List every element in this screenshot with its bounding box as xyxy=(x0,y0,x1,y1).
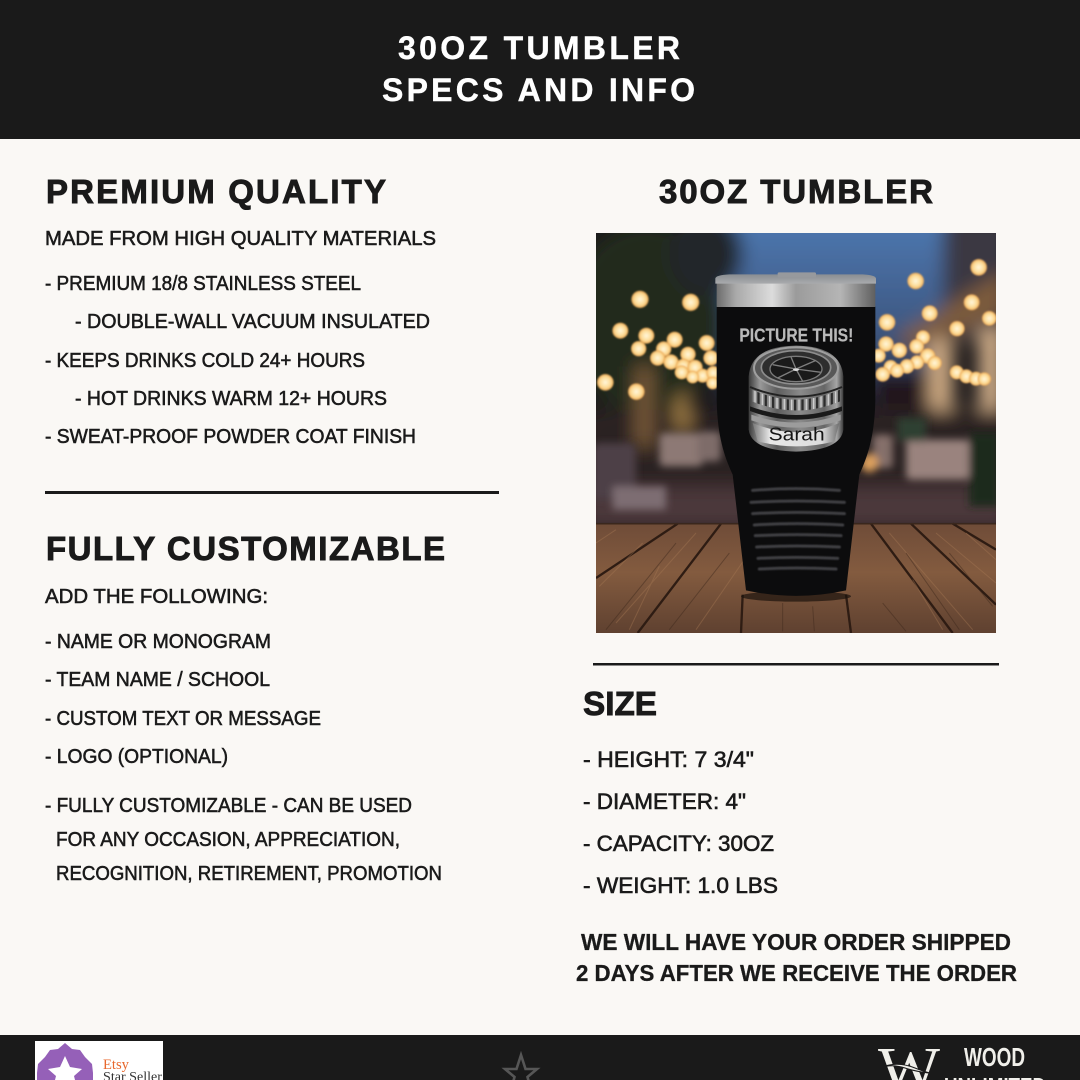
engraved slogan: PICTURE THIS! xyxy=(739,324,853,345)
heading: premium quality: PREMIUM QUALITY xyxy=(46,173,386,210)
icon: outlined star xyxy=(505,1055,537,1080)
panel: fully customizable xyxy=(45,530,445,885)
text block: materials list: - SWEAT-PROOF POWDER COAT FINISH xyxy=(45,426,416,448)
text block: materials list xyxy=(45,228,436,448)
logo: wood unlimited: WOOD xyxy=(964,1042,1025,1072)
text block: customization options: ADD THE FOLLOWING: xyxy=(45,586,268,608)
wooden table xyxy=(596,523,996,633)
title xyxy=(382,30,695,108)
text block: materials list: - HOT DRINKS WARM 12+ HOURS xyxy=(75,388,387,410)
text block: customization options xyxy=(45,586,442,885)
callout: shipping note: 2 DAYS AFTER WE RECEIVE THE ORDER xyxy=(576,960,1017,986)
text block: dimensions: - DIAMETER: 4" xyxy=(583,789,746,814)
text block: materials list: MADE FROM HIGH QUALITY MATERIALS xyxy=(45,228,436,250)
title: SPECS AND INFO xyxy=(382,72,695,108)
text block: customization options: - TEAM NAME / SCHOOL xyxy=(45,669,270,691)
name plate: Sarah xyxy=(769,423,825,444)
callout: shipping note: WE WILL HAVE YOUR ORDER SHIPPED xyxy=(581,929,1011,955)
callout: shipping note xyxy=(576,929,1017,986)
product photo: tumbler on patio table xyxy=(596,233,996,633)
footer band xyxy=(0,1035,1080,1080)
text block: dimensions: - WEIGHT: 1.0 LBS xyxy=(583,873,778,898)
heading: fully customizable: FULLY CUSTOMIZABLE xyxy=(46,530,445,567)
text block: materials list: - DOUBLE-WALL VACUUM INSULATED xyxy=(75,311,430,333)
tumbler xyxy=(715,272,876,602)
text block: materials list: - KEEPS DRINKS COLD 24+ HOURS xyxy=(45,350,365,372)
text block: customization options: - LOGO (OPTIONAL) xyxy=(45,746,228,768)
text block: customization options: FOR ANY OCCASION, APPRECIATION, xyxy=(56,829,400,851)
badge: etsy star seller: Etsy xyxy=(103,1057,129,1073)
badge: etsy star seller xyxy=(35,1041,163,1080)
text block: customization options: - FULLY CUSTOMIZABLE - CAN BE USED xyxy=(45,795,412,817)
text block: materials list: - PREMIUM 18/8 STAINLESS STEEL xyxy=(45,273,361,295)
heading: 30oz tumbler: 30OZ TUMBLER xyxy=(659,173,933,210)
text block: customization options: - CUSTOM TEXT OR MESSAGE xyxy=(45,708,321,730)
string lights xyxy=(597,259,997,400)
text block: dimensions: - HEIGHT: 7 3/4" xyxy=(583,747,754,772)
engraved camera lens xyxy=(749,346,843,452)
panel: premium quality xyxy=(45,173,436,448)
logo: wood unlimited xyxy=(878,1036,1046,1080)
panel: size xyxy=(583,685,778,898)
text block: customization options: - NAME OR MONOGRAM xyxy=(45,631,271,653)
clear lid xyxy=(715,274,876,284)
text block: customization options: RECOGNITION, RETIREMENT, PROMOTION xyxy=(56,863,442,885)
text block: dimensions xyxy=(583,747,778,898)
header band xyxy=(0,0,1080,139)
heading: size: SIZE xyxy=(583,685,657,722)
text block: dimensions: - CAPACITY: 30OZ xyxy=(583,831,774,856)
photo background xyxy=(596,233,996,523)
steel rim xyxy=(717,283,875,307)
tumbler ridges xyxy=(751,489,844,569)
tumbler body xyxy=(717,306,875,596)
title: 30OZ TUMBLER xyxy=(398,30,680,66)
